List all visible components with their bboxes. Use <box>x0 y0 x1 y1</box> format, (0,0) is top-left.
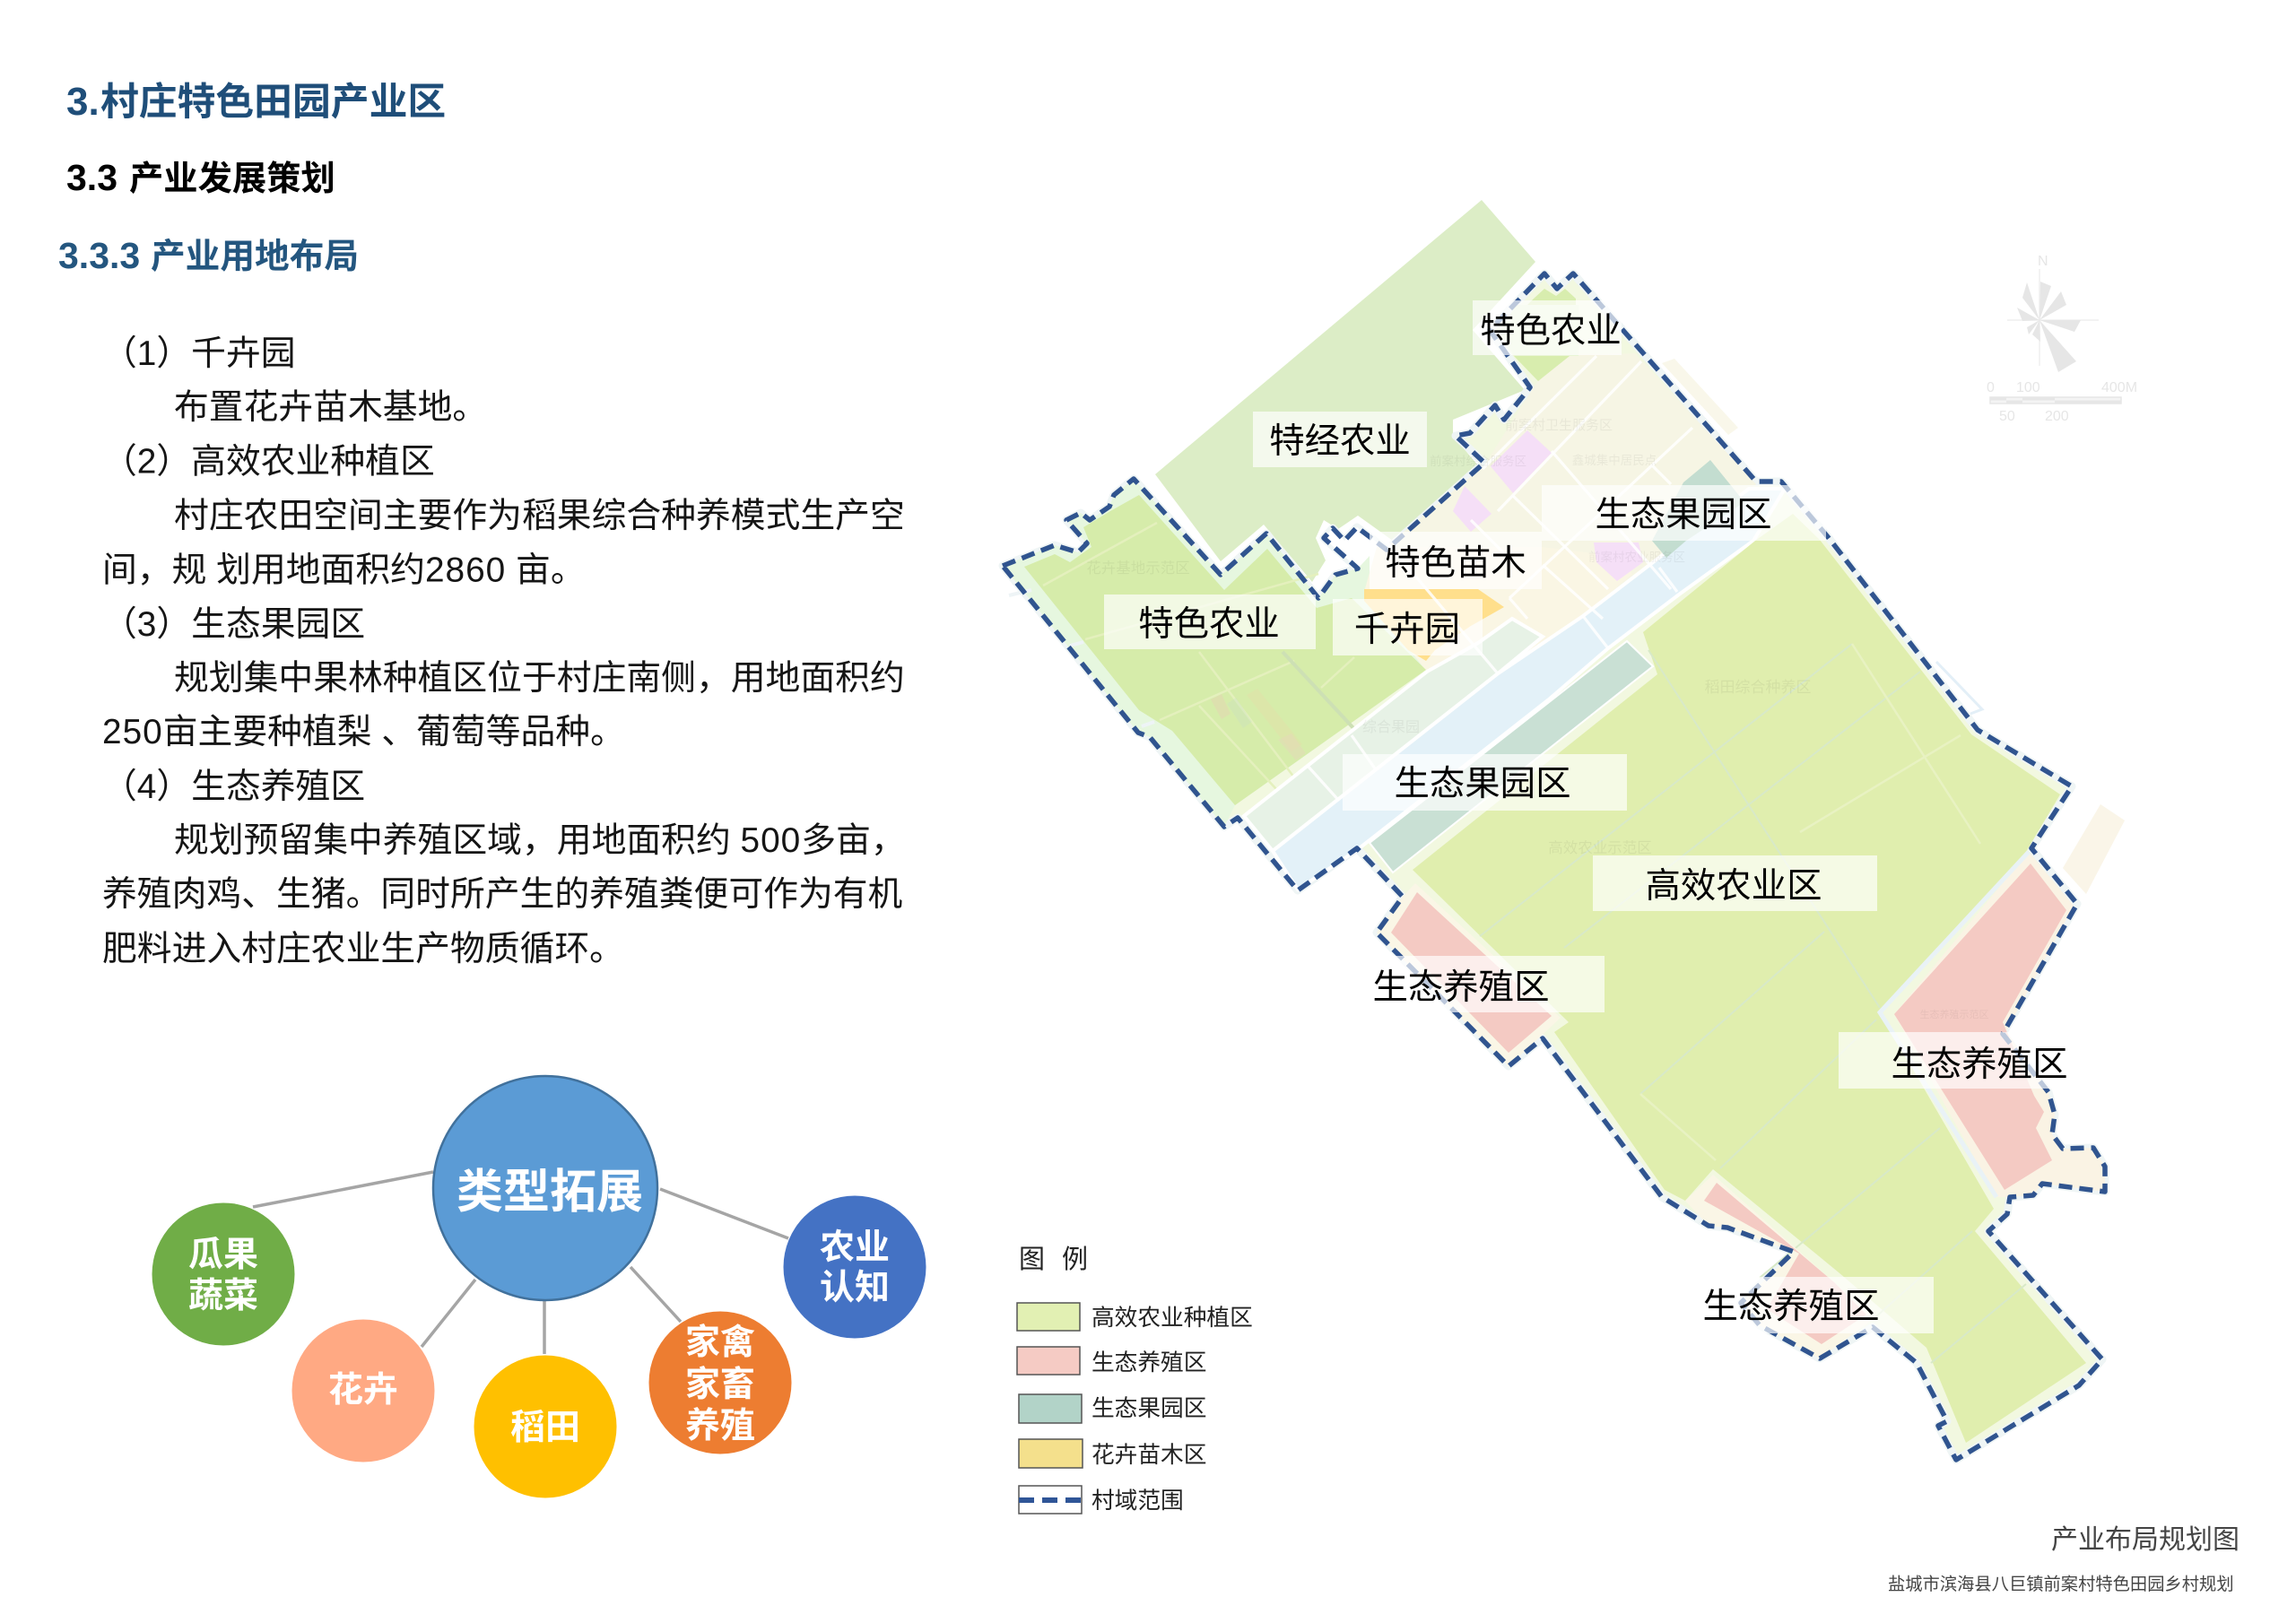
central bubble: 类型拓展: 类型拓展 <box>457 1167 643 1219</box>
bubble: 瓜果蔬菜: 瓜果 <box>188 1236 258 1274</box>
bubble: 瓜果蔬菜 <box>152 1203 294 1345</box>
beige margin: south breeding area <box>1685 1175 1874 1358</box>
zone: west breeding area <box>1391 892 1552 1053</box>
faint map annotations: 高效农业示范区 <box>1548 839 1652 856</box>
title: 村庄特色田园产业区 <box>100 81 446 124</box>
mint margin: west area <box>1003 479 1426 827</box>
text block: land use description: 肥料进入村庄农业生产物质循环。 <box>102 930 624 968</box>
outer strip: east beige <box>1662 359 1738 435</box>
text block: land use description: （3）生态果园区 <box>102 605 365 644</box>
zone: northern specialty farm patches <box>1500 289 1578 381</box>
heading: section 3.3.3: 产业用地布局 <box>151 238 359 276</box>
text block: land use description: （1）千卉园 <box>102 334 296 373</box>
legend item: 生态养殖区: 生态养殖区 <box>1091 1350 1206 1376</box>
faint map annotations: 鑫城集中居民点 <box>1572 453 1657 467</box>
faint crop patches <box>1211 689 1322 773</box>
village boundary base <box>1003 273 2105 1460</box>
bubble: 稻田: 稻田 <box>510 1409 580 1447</box>
heading: section 3.3: 产业发展策划 <box>129 160 335 198</box>
village and orchard roads <box>1307 356 1692 801</box>
text block: land use description: （4）生态养殖区 <box>102 768 365 806</box>
label: 生态养殖区 south <box>1649 1277 1934 1333</box>
label: 高效农业区: 高效农业区 <box>1646 866 1822 906</box>
zone: west specialty farmland <box>1024 495 1426 805</box>
zone: north special economic farmland <box>1155 200 1535 582</box>
field channels <box>1480 644 2026 1363</box>
label: 生态养殖区 west <box>1320 956 1605 1012</box>
legend item: 高效农业种植区 <box>1017 1303 1253 1331</box>
legend item: 花卉苗木区 <box>1019 1439 1206 1468</box>
zone: village settlement <box>1364 353 1756 674</box>
bubble: 瓜果蔬菜: 蔬菜 <box>188 1277 258 1315</box>
faint map annotations: 生态养殖示范区 <box>1919 1008 1989 1020</box>
label: 特经农业 <box>1253 412 1427 467</box>
icon: wind rose: N <box>2038 254 2048 269</box>
legend <box>1017 1245 1253 1514</box>
zone: flower nursery block <box>1364 589 1504 661</box>
zone: upper orchard block <box>1652 460 1744 558</box>
beige margin: east breeding area <box>1894 852 2105 1197</box>
legend item: 生态养殖区 <box>1017 1347 1206 1376</box>
label: 特色农业 west: 特色农业 <box>1138 604 1280 644</box>
outer strip: far east beige <box>2063 804 2125 894</box>
text block: land use description: 250亩主要种植梨 、葡萄等品种。 <box>102 713 625 751</box>
diagram: type expansion bubbles <box>152 1076 926 1497</box>
heading: section 3.3: 3.3 <box>66 157 117 198</box>
connector lines <box>253 1172 788 1354</box>
bubble: 花卉 <box>292 1320 434 1462</box>
label: 高效农业区 <box>1593 855 1877 911</box>
outer strip: east water <box>1936 662 1982 714</box>
label: 生态养殖区 east <box>1839 1032 2123 1089</box>
legend title: 图例 <box>1019 1245 1105 1274</box>
text block: land use description: 村庄农田空间主要作为稻果综合种养模式生产空 <box>174 497 905 535</box>
bubble: 稻田 <box>474 1356 617 1497</box>
scale bar: 0 <box>1987 380 1995 395</box>
legend item: 高效农业种植区: 高效农业种植区 <box>1091 1305 1253 1331</box>
label: 特色农业 north: 特色农业 <box>1480 311 1622 351</box>
text block: land use description: 规划集中果林种植区位于村庄南侧，用地面积约 <box>174 659 905 698</box>
label: 生态养殖区 west: 生态养殖区 <box>1373 968 1549 1007</box>
text block: land use description: 规划预留集中养殖区域，用地面积约 500多亩， <box>174 821 906 860</box>
strip: water band <box>1273 489 1785 890</box>
label: 生态果园区 north <box>1542 485 1826 541</box>
label: 特经农业: 特经农业 <box>1269 421 1411 461</box>
bubble: 家禽家畜养殖: 家禽 <box>685 1324 755 1362</box>
zone: lower orchard block <box>1370 641 1653 872</box>
faint map annotations: 综合果园 <box>1362 719 1420 735</box>
bubble: 农业认知: 农业 <box>820 1228 890 1267</box>
faint map annotations: 前案村综合服务区 <box>1430 454 1526 468</box>
central bubble: 类型拓展 <box>433 1076 657 1300</box>
text block: land use description: 间，规 划用地面积约2860 亩。 <box>102 551 586 590</box>
bubble: 农业认知: 认知 <box>820 1269 890 1307</box>
label: 生态果园区 south <box>1343 754 1627 811</box>
scale bar: 50 <box>1999 409 2015 424</box>
text block: land use description: 养殖肉鸡、生猪。同时所产生的养殖粪便可作为有机 <box>102 875 902 914</box>
project name: 盐城市滨海县八巨镇前案村特色田园乡村规划 <box>1888 1575 2234 1594</box>
zone: south breeding area <box>1704 1183 1866 1344</box>
label: 生态养殖区 east: 生态养殖区 <box>1892 1045 2067 1084</box>
label: 千卉园 <box>1333 599 1483 655</box>
beige margin: west breeding area <box>1377 883 1561 1066</box>
scale bar: 200 <box>2045 409 2069 424</box>
heading: section 3.3.3: 3.3.3 <box>58 235 140 276</box>
legend item: 花卉苗木区: 花卉苗木区 <box>1091 1442 1206 1468</box>
title: 3. <box>66 80 100 124</box>
label: 特色农业 north <box>1473 300 1622 355</box>
legend item: 村域范围: 村域范围 <box>1091 1488 1184 1514</box>
village plots: lilac <box>1453 430 1643 581</box>
label: 千卉园: 千卉园 <box>1354 610 1460 649</box>
warm part of the village <box>1364 547 1632 674</box>
faint map annotations: 前案村农业服务区 <box>1588 550 1685 564</box>
notch near north farmland <box>1324 527 1387 574</box>
bubble: 农业认知 <box>784 1196 926 1338</box>
bubble: 家禽家畜养殖 <box>649 1311 791 1454</box>
text block: land use description: （2）高效农业种植区 <box>102 443 435 481</box>
map caption: 产业布局规划图 <box>2051 1525 2239 1555</box>
scale bar <box>1987 380 2137 424</box>
text block: land use description: 布置花卉苗木基地。 <box>174 388 487 427</box>
zone: east breeding area <box>1894 864 2066 1190</box>
label: 特色苗木 <box>1370 532 1542 589</box>
legend item: 村域范围 <box>1019 1486 1184 1514</box>
label: 特色苗木: 特色苗木 <box>1385 543 1526 583</box>
faint map annotations <box>1086 417 1989 1020</box>
scale bar: 400M <box>2101 380 2137 395</box>
strip: orchard band <box>1244 619 1543 851</box>
map: industry layout <box>1003 200 2125 1460</box>
text block: land use description <box>102 334 906 968</box>
dashed village boundary <box>1003 273 2105 1460</box>
west farmland field lines <box>1009 523 1354 789</box>
bubble: 家禽家畜养殖: 家畜 <box>685 1366 755 1404</box>
icon: wind rose <box>2007 254 2099 372</box>
legend item: 生态果园区: 生态果园区 <box>1091 1395 1206 1421</box>
label: 生态果园区 north: 生态果园区 <box>1596 495 1771 534</box>
bubble: 家禽家畜养殖: 养殖 <box>685 1407 755 1445</box>
zone: high-efficiency agriculture field <box>1413 514 2086 1443</box>
bubble: 花卉: 花卉 <box>328 1371 398 1410</box>
label: 特色农业 west <box>1104 595 1316 649</box>
faint map annotations: 花卉基地示范区 <box>1086 560 1190 577</box>
faint map annotations: 稻田综合种养区 <box>1704 679 1812 696</box>
scale bar: 100 <box>2016 380 2040 395</box>
faint map annotations: 前案村卫生服务区 <box>1505 417 1613 433</box>
label: 生态果园区 south: 生态果园区 <box>1395 764 1570 803</box>
label: 生态养殖区 south: 生态养殖区 <box>1703 1287 1879 1326</box>
road: east breeding area edge <box>1880 852 2029 1197</box>
legend item: 生态果园区 <box>1019 1394 1206 1423</box>
